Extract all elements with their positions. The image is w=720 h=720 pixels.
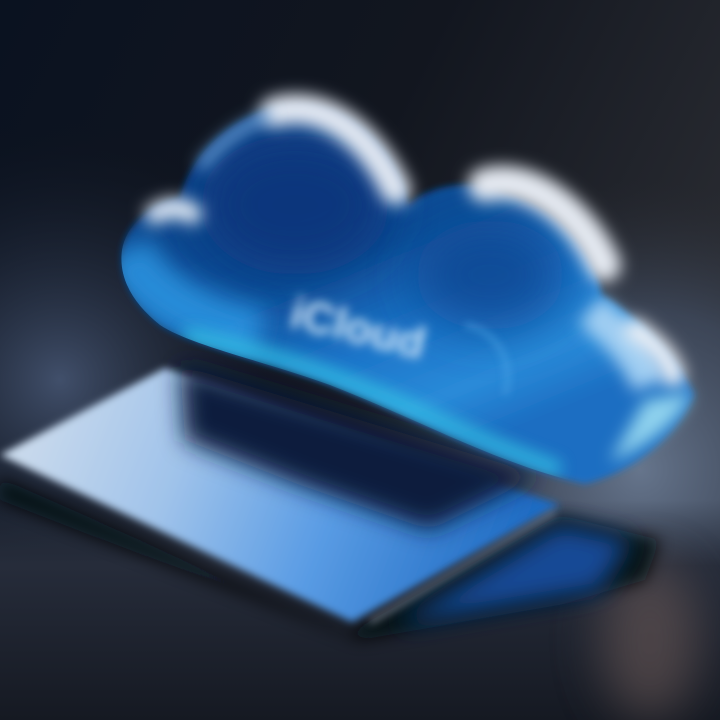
cloud shadow on screen <box>180 365 540 530</box>
tablet dark edge <box>0 478 660 640</box>
tablet edge highlight <box>370 512 555 622</box>
cloud <box>121 105 694 484</box>
blue rim: top-left lobe <box>200 115 270 168</box>
cloud body <box>121 105 694 484</box>
dark upper lobe shade <box>200 135 390 275</box>
white rim: small left lobe <box>155 208 192 214</box>
tablet glow at right corner <box>395 525 630 625</box>
pale band on right side <box>590 310 650 385</box>
white rim: top lobe <box>275 109 396 190</box>
tablet screen <box>0 368 560 622</box>
white rim: far right lobe <box>635 330 674 376</box>
pale lower right corner <box>610 392 692 462</box>
tablet <box>0 365 660 640</box>
faint ring on cloud <box>465 325 508 395</box>
white rim: right lobe <box>485 183 604 265</box>
cloud cyan lower rim <box>185 335 560 470</box>
blurred cloud label: iCloud <box>286 288 430 369</box>
cloud left highlight <box>124 250 260 335</box>
